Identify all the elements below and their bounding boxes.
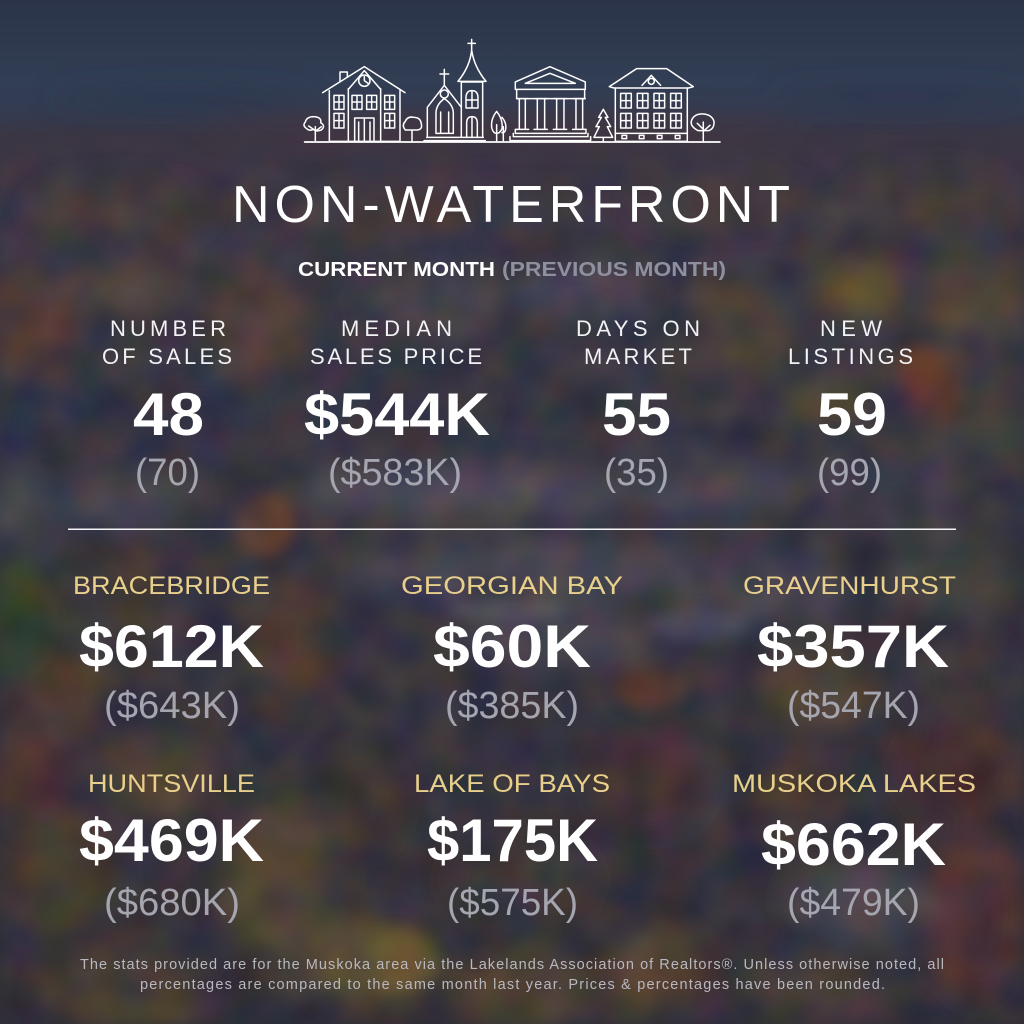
region: Gravenhurst: ($547K): [787, 685, 920, 727]
footnote: percentages are compared to the same month last year. Prices & percentages have been rounded.: [140, 977, 885, 993]
icon: manor: [609, 69, 693, 141]
region: Georgian Bay: ($385K): [445, 685, 579, 727]
region: Bracebridge: [73, 572, 270, 727]
subtitle: current vs previous month: (PREVIOUS MONTH): [502, 259, 726, 281]
region: Gravenhurst: GRAVENHURST: [743, 572, 956, 600]
stat: days on market: 55: [602, 381, 671, 448]
region: Muskoka Lakes: MUSKOKA LAKES: [732, 770, 976, 798]
stat: number of sales: 48: [133, 381, 204, 448]
region: Huntsville: $469K: [79, 807, 264, 874]
icon: ground line: [305, 139, 720, 145]
stat: new listings: NEW: [820, 316, 882, 341]
stat: median sales price: [304, 316, 490, 494]
region: Lake of Bays: LAKE OF BAYS: [414, 770, 610, 798]
icon: church: [424, 39, 486, 141]
stat: median sales price: MEDIAN: [341, 316, 452, 341]
region: Gravenhurst: [743, 572, 956, 727]
region: Lake of Bays: ($575K): [447, 882, 578, 924]
stat: number of sales: (70): [135, 452, 200, 494]
stat: new listings: 59: [817, 381, 887, 448]
stat: number of sales: NUMBER: [110, 316, 226, 341]
region: Lake of Bays: [414, 770, 610, 924]
stat: days on market: (35): [604, 452, 669, 494]
stat: new listings: LISTINGS: [788, 344, 913, 369]
subtitle: current vs previous month: CURRENT MONTH: [298, 259, 495, 281]
town skyline icon: [304, 39, 720, 142]
stat: median sales price: ($583K): [328, 452, 462, 494]
region: Georgian Bay: $60K: [433, 613, 591, 680]
stat: days on market: DAYS ON: [576, 316, 700, 341]
region: Muskoka Lakes: $662K: [761, 811, 946, 878]
region: Georgian Bay: GEORGIAN BAY: [401, 572, 623, 600]
stat: median sales price: SALES PRICE: [310, 344, 482, 369]
stat: days on market: MARKET: [584, 344, 692, 369]
region: Muskoka Lakes: [732, 770, 976, 924]
title: NON-WATERFRONT: [232, 176, 790, 234]
region: Lake of Bays: $175K: [427, 807, 598, 874]
region: Huntsville: [79, 770, 264, 924]
subtitle: current vs previous month: [298, 259, 726, 281]
region: Bracebridge: $612K: [79, 613, 264, 680]
region: Georgian Bay: [401, 572, 623, 727]
stat: new listings: (99): [817, 452, 882, 494]
icon: trees: [304, 109, 714, 141]
region: Muskoka Lakes: ($479K): [787, 882, 920, 924]
stat: new listings: [788, 316, 913, 494]
footnote: The stats provided are for the Muskoka area via the Lakelands Association of Realtors®. Unless otherwise noted, all: [80, 957, 944, 973]
region: Bracebridge: BRACEBRIDGE: [73, 572, 270, 600]
icon: columned hall: [510, 67, 591, 141]
icon: clock house: [323, 67, 405, 141]
region: Huntsville: ($680K): [104, 882, 240, 924]
stat: number of sales: OF SALES: [102, 344, 232, 369]
region: Bracebridge: ($643K): [104, 685, 240, 727]
stat: median sales price: $544K: [304, 381, 490, 448]
footnote: [80, 957, 944, 993]
stat: days on market: [576, 316, 700, 494]
region: Gravenhurst: $357K: [757, 613, 949, 680]
region: Huntsville: HUNTSVILLE: [88, 770, 255, 798]
stat: number of sales: [102, 316, 232, 494]
